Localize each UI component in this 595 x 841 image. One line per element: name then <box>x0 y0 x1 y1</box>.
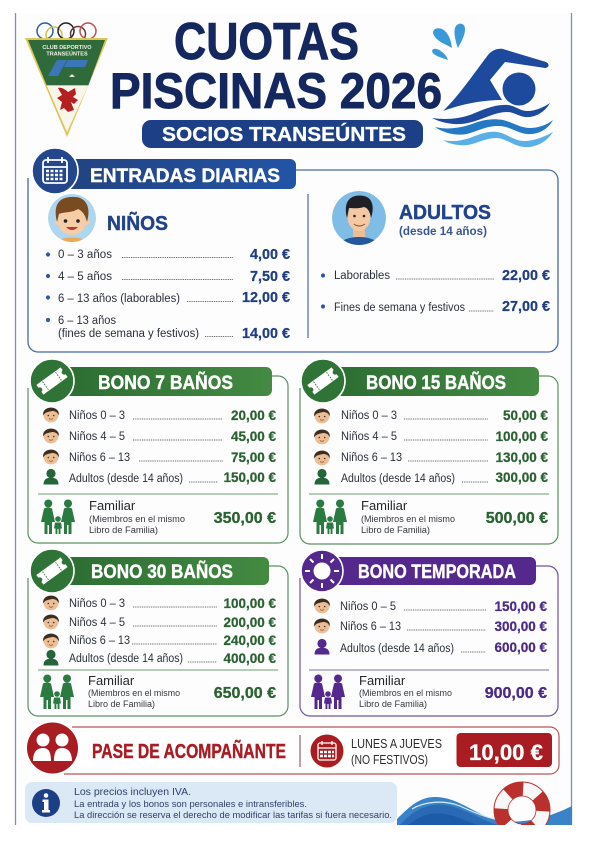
subtitle pill <box>142 120 423 148</box>
panel: bono 7 baños <box>28 359 288 543</box>
avatar: adult <box>332 191 386 246</box>
price rows: 300,00 € <box>495 470 548 485</box>
heading: niños: NIÑOS <box>107 212 168 235</box>
price rows: Niños 0 – 3 <box>69 598 125 610</box>
price rows: 100,00 € <box>223 596 276 611</box>
price rows: Niños 0 – 3 <box>69 410 125 422</box>
schedule text <box>351 736 442 767</box>
familiar row <box>40 673 276 709</box>
familiar row: Familiar <box>361 498 408 513</box>
price rows: Niños 6 – 13 <box>341 452 402 464</box>
schedule text: LUNES A JUEVES <box>351 736 442 751</box>
list: adultos prices: Fines de semana y festivos <box>334 302 465 314</box>
heading bar: bono 7 baños: BONO 7 BAÑOS <box>98 371 233 394</box>
panel: pase de acompañante <box>27 722 559 774</box>
panel: bono 15 baños <box>300 359 558 544</box>
list: niños prices: 14,00 € <box>242 326 290 342</box>
club crest logo <box>25 23 108 137</box>
price rows: 200,00 € <box>223 615 276 630</box>
price rows: 300,00 € <box>494 619 547 634</box>
icon: calendar <box>32 148 78 194</box>
price rows: Niños 6 – 13 <box>340 621 401 633</box>
price rows: Niños 4 – 5 <box>341 431 397 443</box>
familiar row: 900,00 € <box>485 685 547 702</box>
price rows: 400,00 € <box>223 651 276 666</box>
price rows: Niños 4 – 5 <box>69 431 125 443</box>
price rows: 75,00 € <box>231 450 276 465</box>
info box <box>25 782 397 823</box>
familiar row: Libro de Familia) <box>359 699 427 709</box>
price rows: 20,00 € <box>231 408 276 423</box>
heading bar: bono 15 baños: BONO 15 BAÑOS <box>366 371 506 394</box>
heading bar: entradas diarias <box>60 159 296 189</box>
list: niños prices: 4 – 5 años <box>58 271 112 283</box>
price rows: Adultos (desde 14 años) <box>341 473 455 485</box>
heading bar: bono temporada: BONO TEMPORADA <box>358 561 516 583</box>
familiar row: (Miembros en el mismo <box>89 514 185 524</box>
list: adultos prices: Laborables <box>334 270 390 282</box>
panel: bono 30 baños <box>28 549 288 716</box>
list: niños prices: (fines de semana y festivos) <box>58 328 199 340</box>
panel: entradas diarias <box>28 148 558 352</box>
title: PISCINAS 2026 <box>110 63 442 119</box>
familiar row: 500,00 € <box>486 510 548 527</box>
price rows: 50,00 € <box>503 408 548 423</box>
familiar row: (Miembros en el mismo <box>88 688 180 698</box>
icon: sun <box>301 550 343 592</box>
heading: adultos: ADULTOS <box>399 202 491 224</box>
heading bar: bono 30 baños <box>60 557 269 585</box>
icon: calendar <box>310 734 344 768</box>
heading bar: entradas diarias: ENTRADAS DIARIAS <box>90 165 280 187</box>
club crest logo: TRANSEÚNTES <box>46 50 88 58</box>
list: niños prices: 4,00 € <box>250 247 290 263</box>
list: niños prices: 7,50 € <box>250 269 290 285</box>
familiar row: (Miembros en el mismo <box>359 688 452 698</box>
price rows: 130,00 € <box>495 450 548 465</box>
list: niños prices: 12,00 € <box>242 290 290 306</box>
familiar row: Familiar <box>359 673 406 688</box>
heading bar: bono 7 baños <box>60 367 272 396</box>
list: niños prices <box>46 247 290 342</box>
familiar row: Libro de Familia) <box>361 525 430 535</box>
club crest logo: CLUB DEPORTIVO <box>42 45 92 51</box>
info text <box>74 786 392 821</box>
price tag <box>456 733 552 767</box>
olympic rings <box>37 23 96 43</box>
avatar: boy <box>48 194 96 245</box>
familiar row <box>41 498 276 535</box>
price rows <box>43 408 276 485</box>
price rows: 45,00 € <box>231 429 276 444</box>
title: CUOTAS <box>174 13 359 71</box>
familiar row: 650,00 € <box>214 685 276 702</box>
familiar row: Familiar <box>88 673 135 688</box>
heading: adultos <box>399 202 491 238</box>
familiar row: Libro de Familia) <box>88 699 155 709</box>
price rows <box>314 599 547 655</box>
list: adultos prices: 22,00 € <box>502 268 550 284</box>
heading bar: bono 30 baños: BONO 30 BAÑOS <box>91 560 233 583</box>
icon: swimmer <box>432 24 553 147</box>
familiar row <box>313 498 548 535</box>
icon: lifebuoy <box>494 782 550 825</box>
price rows <box>314 408 548 485</box>
price rows: Adultos (desde 14 años) <box>340 643 454 655</box>
familiar row: (Miembros en el mismo <box>361 514 455 524</box>
divider <box>307 194 309 338</box>
info text: La entrada y los bonos son personales e intransferibles. <box>74 799 307 810</box>
price rows: 100,00 € <box>495 429 548 444</box>
price rows: Adultos (desde 14 años) <box>69 473 183 485</box>
price rows: 240,00 € <box>223 633 276 648</box>
title <box>110 13 442 119</box>
heading bar: bono 15 baños <box>331 367 539 396</box>
list: niños prices: 6 – 13 años <box>58 315 116 327</box>
icon: ticket <box>301 359 345 403</box>
heading bar: bono temporada <box>330 557 536 585</box>
price rows: Niños 4 – 5 <box>69 617 125 629</box>
icon: ticket <box>30 549 74 593</box>
schedule text: (NO FESTIVOS) <box>351 752 428 767</box>
list: adultos prices <box>321 268 550 315</box>
price rows: 150,00 € <box>223 470 276 485</box>
price rows: Niños 0 – 3 <box>341 410 397 422</box>
price rows: Niños 6 – 13 <box>69 452 130 464</box>
list: adultos prices: 27,00 € <box>502 299 550 315</box>
subtitle pill: SOCIOS TRANSEÚNTES <box>162 122 406 146</box>
icon: ticket <box>30 359 74 403</box>
info text: Los precios incluyen IVA. <box>74 786 191 798</box>
waves and lifebuoy <box>397 782 572 825</box>
price tag: 10,00 € <box>469 740 543 765</box>
list: niños prices: 0 – 3 años <box>58 249 112 261</box>
info text: La dirección se reserva el derecho de modificar las tarifas si fuera necesario. <box>74 810 392 821</box>
price rows <box>43 596 276 666</box>
price rows: Niños 6 – 13 <box>69 635 130 647</box>
familiar row: 350,00 € <box>214 510 276 527</box>
icon: info <box>32 789 60 817</box>
familiar row: Familiar <box>89 498 136 513</box>
familiar row: Libro de Familia) <box>89 525 158 535</box>
heading: pase de acompañante: PASE DE ACOMPAÑANTE <box>92 740 286 763</box>
panel: bono temporada <box>300 550 558 716</box>
price rows: Adultos (desde 14 años) <box>69 653 183 665</box>
heading: adultos: (desde 14 años) <box>399 224 487 238</box>
price rows: 150,00 € <box>494 599 547 614</box>
price rows: 600,00 € <box>494 640 547 655</box>
list: niños prices: 6 – 13 años (laborables) <box>58 293 180 305</box>
icon: companions <box>27 722 78 774</box>
price rows: Niños 0 – 5 <box>340 601 396 613</box>
familiar row <box>311 673 547 709</box>
